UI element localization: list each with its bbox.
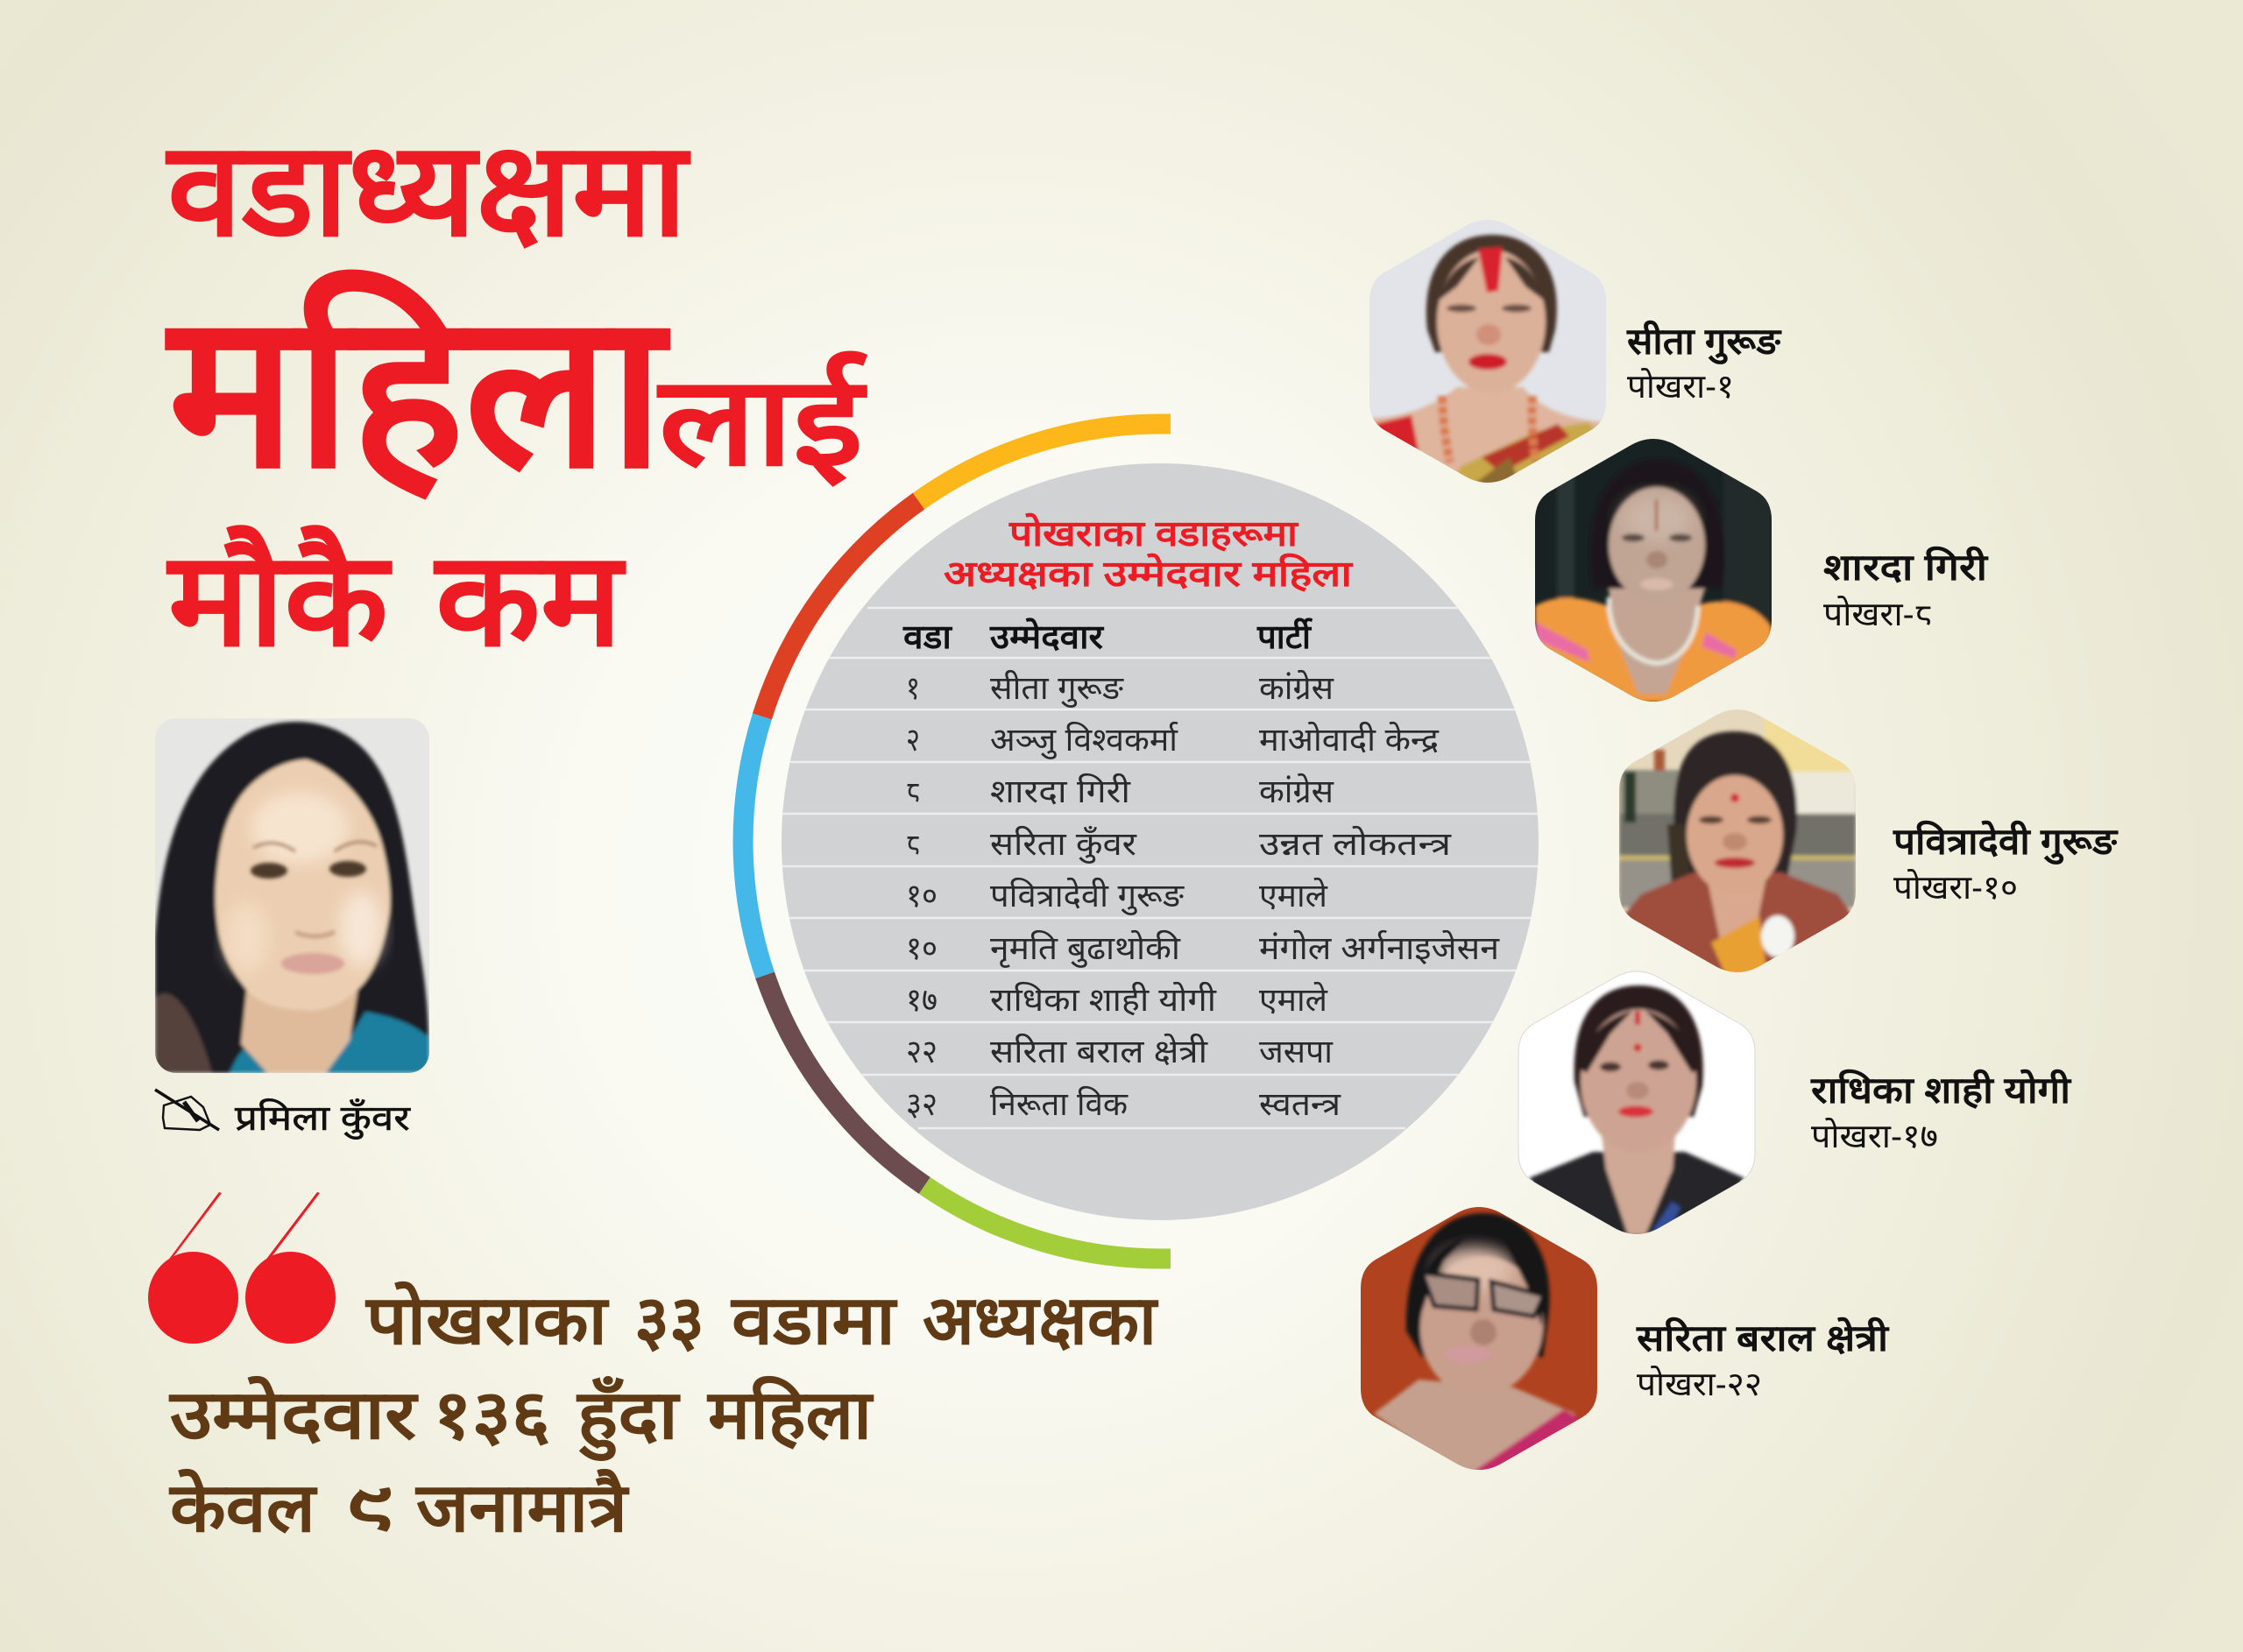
table rows: कांग्रेस: [1259, 669, 1334, 706]
icon: quotation mark: [148, 1192, 336, 1344]
candidate photo: Sharada Giri: [1535, 431, 1772, 711]
quote line 2: १३६: [433, 1376, 550, 1453]
quote line 3: [168, 1468, 630, 1546]
label: Radhika Shahi Yogi: [1810, 1069, 2072, 1155]
label: Sharada Giri: [1823, 546, 1989, 633]
table rows: ३२: [906, 1086, 938, 1122]
table rows: जसपा: [1259, 1034, 1334, 1070]
label: Sarita Baral Kshetri: पोखरा-२२: [1637, 1365, 1762, 1403]
table rows: एमाले: [1259, 877, 1328, 914]
table rows: सीता गुरूङ: [990, 669, 1124, 708]
quote line 2: हुँदा: [576, 1375, 681, 1461]
candidate photo: Radhika Shahi Yogi: [1518, 964, 1755, 1244]
quote line 3: जनामात्रै: [414, 1468, 630, 1546]
label: Sita Gurung: सीता गुरूङ: [1626, 320, 1782, 364]
quote line 2: [168, 1375, 874, 1461]
quote line 3: केवल: [168, 1468, 318, 1546]
table rows: पवित्रादेवी गुरूङ: [990, 877, 1185, 915]
label: Sharada Giri: पोखरा-८: [1823, 595, 1932, 633]
title line 3: [166, 525, 627, 673]
quote line 1: पोखराका: [364, 1281, 610, 1359]
quote line 1: [364, 1281, 1159, 1359]
table rows: शारदा गिरी: [990, 773, 1132, 809]
table header row: उम्मेदवार: [989, 618, 1105, 656]
table rows: सरिता कुँवर: [990, 825, 1137, 864]
ring: five coloured arc segments: [743, 424, 1171, 1259]
title line 2: mahila: महिला: [165, 269, 670, 511]
author name: प्रमिला कुँवर: [235, 1098, 411, 1140]
label: Pabitra Devi Gurung: [1893, 820, 2119, 907]
table rows: निरूता विक: [990, 1085, 1129, 1122]
table rows: राधिका शाही योगी: [990, 981, 1218, 1018]
title line 1: वडाध्यक्षमा: [165, 116, 691, 263]
table rows: सरिता बराल क्षेत्री: [990, 1033, 1209, 1070]
author portrait photo: [155, 718, 429, 1073]
table header row: वडा: [902, 619, 952, 656]
label: Sita Gurung: पोखरा-१: [1627, 367, 1734, 406]
quote line 3: ९: [344, 1469, 393, 1546]
table title: पोखराका वडाहरूमा: [1008, 512, 1299, 554]
table rows: १०: [906, 878, 938, 914]
table rows: [906, 669, 1501, 1122]
title line 2: suffix: लाई: [656, 350, 868, 491]
quote line 1: ३३: [634, 1281, 704, 1359]
table rows: स्वतन्त्र: [1259, 1086, 1341, 1122]
table rows: ८: [906, 826, 920, 862]
table rows: २: [906, 722, 920, 758]
title line 3: मौकै: [166, 525, 393, 673]
table rows: मंगोल अर्गनाइजेसन: [1259, 929, 1501, 966]
table rows: अञ्जु विश्वकर्मा: [990, 721, 1178, 759]
icon: hand writing with pen: [155, 1090, 219, 1130]
table rows: माओवादी केन्द्र: [1259, 721, 1440, 758]
title line 3: कम: [433, 526, 627, 673]
quote line 1: वडामा: [730, 1281, 898, 1359]
author byline: [155, 1090, 411, 1140]
label: Sharada Giri: शारदा गिरी: [1823, 546, 1989, 588]
table title: [944, 512, 1354, 594]
table rows: कांग्रेस: [1259, 773, 1334, 809]
table rows: नृमति बुढाथोकी: [990, 929, 1181, 968]
label: Pabitra Devi Gurung: पोखरा-१०: [1893, 868, 2018, 907]
label: Sarita Baral Kshetri: [1636, 1317, 1890, 1403]
quote line 2: उम्मेदवार: [168, 1375, 419, 1453]
table rows: ८: [906, 773, 920, 809]
table header row: पार्टी: [1256, 618, 1313, 656]
table rows: १०: [906, 930, 938, 966]
label: Radhika Shahi Yogi: पोखरा-१७: [1811, 1117, 1938, 1155]
table title: अध्यक्षका उम्मेदवार महिला: [944, 553, 1354, 594]
table rows: १७: [906, 982, 938, 1018]
label: Sita Gurung: [1626, 320, 1782, 406]
title: [165, 116, 868, 673]
quote text: [168, 1281, 1159, 1546]
candidate photo: Sarita Baral Kshetri: [1361, 1199, 1598, 1479]
table rows: उन्नत लोकतन्त्र: [1259, 825, 1452, 862]
label: Pabitra Devi Gurung: पवित्रादेवी गुरूङ: [1893, 820, 2119, 865]
label: Radhika Shahi Yogi: राधिका शाही योगी: [1810, 1069, 2072, 1111]
candidate photo: Sita Gurung: [1369, 212, 1606, 492]
table rows: २२: [906, 1034, 938, 1070]
quote line 2: महिला: [706, 1375, 874, 1453]
table rows: एमाले: [1259, 981, 1328, 1018]
quote line 1: अध्यक्षका: [923, 1281, 1159, 1359]
table panel: grey circle: [782, 463, 1539, 1220]
table header row: [902, 618, 1313, 656]
label: Sarita Baral Kshetri: सरिता बराल क्षेत्री: [1636, 1317, 1890, 1359]
candidate photo: Pabitra Devi Gurung: [1619, 702, 1856, 982]
table rows: १: [906, 670, 920, 706]
